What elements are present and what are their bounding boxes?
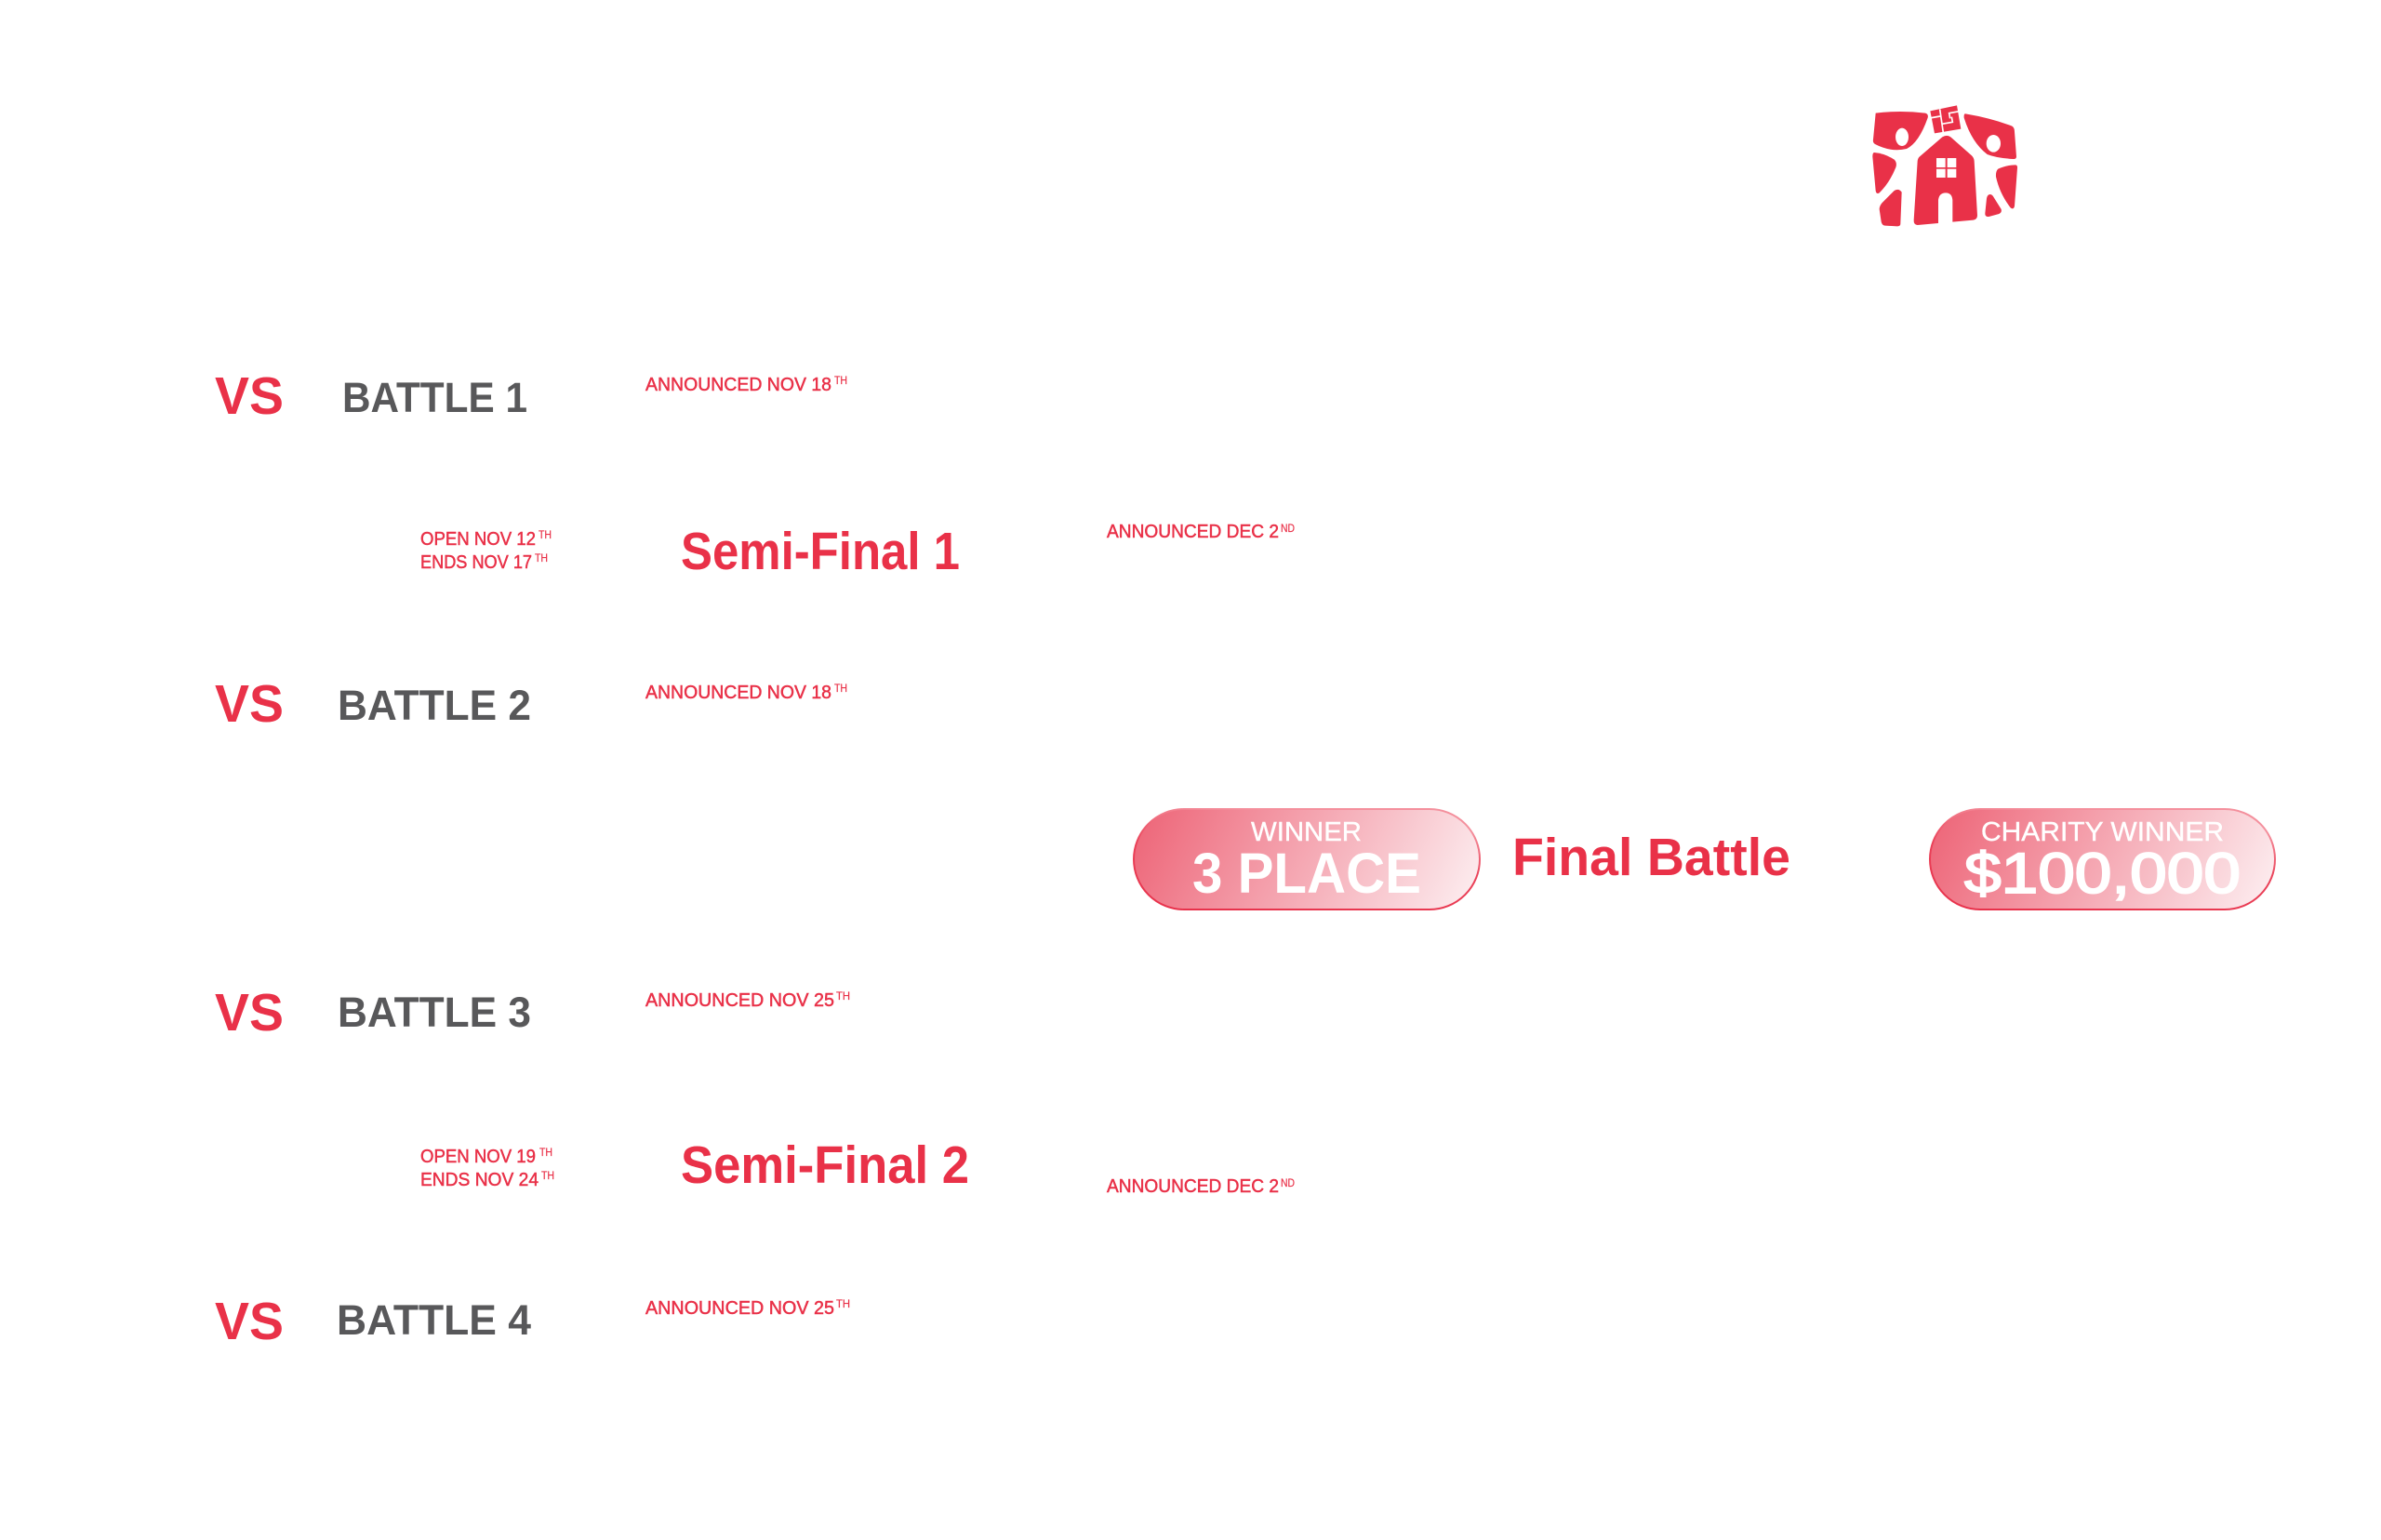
battle 4 row: TH bbox=[836, 1299, 850, 1310]
battle 2 row: TH bbox=[834, 684, 847, 695]
battle 1 row: ANNOUNCED NOV 18 bbox=[645, 375, 831, 395]
battle 2 row: BATTLE 2 bbox=[338, 682, 531, 729]
semi-final 2 announcement: ANNOUNCED DEC 2 bbox=[1107, 1176, 1279, 1197]
prize pill: winner 3 place: 3 PLACE bbox=[1192, 842, 1421, 905]
battle 3 row: BATTLE 3 bbox=[338, 989, 531, 1036]
battle 2 row: VS bbox=[215, 674, 284, 734]
battle 1 row: BATTLE 1 bbox=[342, 374, 527, 421]
heading: final battle: Final Battle bbox=[1512, 828, 1790, 887]
battle 3 row bbox=[215, 983, 850, 1042]
battle 4 row: BATTLE 4 bbox=[337, 1296, 531, 1344]
semi-final 1 dates bbox=[420, 529, 552, 573]
battle 1 row: VS bbox=[215, 366, 284, 426]
semi-final 2 dates: TH bbox=[541, 1171, 554, 1182]
semi-final 2 announcement: ND bbox=[1281, 1178, 1295, 1189]
prize pill: winner 3 place: WINNER bbox=[1251, 817, 1362, 847]
heading: semi-final 1: Semi-Final 1 bbox=[681, 522, 960, 581]
battle 2 row: ANNOUNCED NOV 18 bbox=[645, 683, 831, 703]
semi-final 2 dates: TH bbox=[539, 1148, 552, 1159]
battle 4 row: ANNOUNCED NOV 25 bbox=[645, 1298, 834, 1319]
battle 3 row: TH bbox=[836, 991, 850, 1002]
semi-final 1 dates: OPEN NOV 12 bbox=[420, 529, 536, 550]
prize pill: winner 3 place bbox=[1134, 809, 1480, 909]
battle 1 row: TH bbox=[834, 376, 847, 387]
battle 3 row: ANNOUNCED NOV 25 bbox=[645, 990, 834, 1011]
battle 4 row bbox=[215, 1292, 850, 1351]
prize pill: charity winner: CHARITY WINNER bbox=[1981, 817, 2224, 847]
semi-final 2 dates: ENDS NOV 24 bbox=[420, 1170, 539, 1190]
prize pill: charity winner: $100,000 bbox=[1964, 842, 2241, 905]
semi-final 2 dates: OPEN NOV 19 bbox=[420, 1147, 536, 1167]
semi-final 1 dates: TH bbox=[539, 530, 552, 541]
semi-final 1 dates: TH bbox=[535, 553, 548, 564]
prize pill: charity winner bbox=[1930, 809, 2275, 909]
battle 3 row: VS bbox=[215, 983, 284, 1042]
battle 2 row bbox=[215, 674, 847, 734]
battle 4 row: VS bbox=[215, 1292, 284, 1351]
semi-final 1 dates: ENDS NOV 17 bbox=[420, 552, 532, 573]
heading: semi-final 2: Semi-Final 2 bbox=[681, 1135, 969, 1195]
battle 1 row bbox=[215, 366, 847, 426]
semi-final 2 dates bbox=[420, 1147, 554, 1190]
semi-final 1 announcement: ANNOUNCED DEC 2 bbox=[1107, 522, 1279, 542]
logo: charity house with two figures bbox=[1872, 105, 2017, 226]
semi-final 1 announcement: ND bbox=[1281, 524, 1295, 535]
